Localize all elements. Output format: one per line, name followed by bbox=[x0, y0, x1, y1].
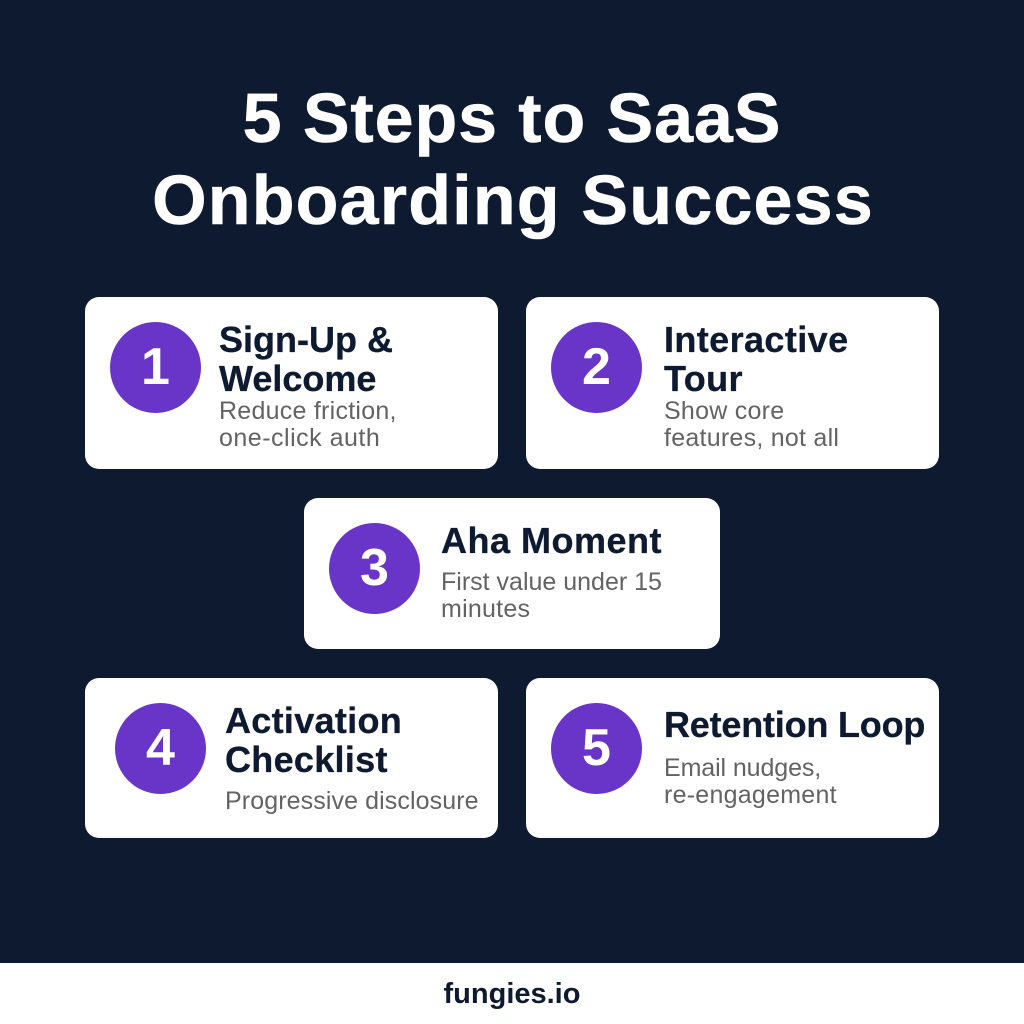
heading: step 4 bbox=[225, 700, 402, 780]
icon: number 4: 4 bbox=[146, 719, 175, 777]
heading: step 4: Activation bbox=[225, 700, 402, 741]
text: step 2: features, not all bbox=[664, 424, 839, 452]
text: step 4: Progressive disclosure bbox=[225, 787, 479, 815]
heading: step 1 bbox=[218, 319, 393, 399]
text: step 1 bbox=[219, 397, 397, 452]
icon: number 5 bbox=[551, 703, 642, 794]
panel: step 4 bbox=[85, 678, 498, 838]
heading: step 2: Interactive bbox=[664, 319, 848, 360]
text: step 3: minutes bbox=[441, 595, 530, 623]
icon: number 3 bbox=[329, 523, 420, 614]
icon: number 2: 2 bbox=[582, 338, 611, 396]
text: step 3 bbox=[441, 568, 662, 623]
footer brand: fungies.io bbox=[444, 978, 580, 1010]
heading: step 5: Retention Loop bbox=[664, 704, 925, 745]
icon: number 3: 3 bbox=[360, 539, 389, 597]
heading: step 2: Tour bbox=[664, 358, 743, 399]
icon: number 5: 5 bbox=[582, 719, 611, 777]
panel: step 2 bbox=[526, 297, 939, 469]
text: step 5: Email nudges, bbox=[664, 754, 821, 782]
title bbox=[152, 79, 874, 240]
text: step 5: re-engagement bbox=[664, 781, 837, 809]
heading: step 1: Welcome bbox=[219, 358, 376, 399]
heading: step 2 bbox=[664, 319, 848, 399]
text: step 1: one-click auth bbox=[219, 424, 380, 452]
icon: number 1: 1 bbox=[141, 338, 170, 396]
icon: number 4 bbox=[115, 703, 206, 794]
panel: step 5 bbox=[526, 678, 939, 838]
text: step 3: First value under 15 bbox=[441, 568, 662, 596]
panel: step 1 bbox=[85, 297, 498, 469]
footer bbox=[0, 963, 1024, 1024]
heading: step 3: Aha Moment bbox=[441, 520, 662, 561]
text: step 2 bbox=[664, 397, 839, 452]
icon: number 1 bbox=[110, 322, 201, 413]
panel: step 3 bbox=[304, 498, 720, 649]
text: step 1: Reduce friction, bbox=[219, 397, 397, 425]
heading: step 4: Checklist bbox=[225, 739, 388, 780]
text: step 2: Show core bbox=[664, 397, 784, 425]
title: 5 Steps to SaaS bbox=[243, 79, 781, 157]
title: Onboarding Success bbox=[152, 161, 874, 239]
heading: step 1: Sign-Up & bbox=[219, 319, 393, 360]
text: step 5 bbox=[664, 754, 837, 809]
icon: number 2 bbox=[551, 322, 642, 413]
